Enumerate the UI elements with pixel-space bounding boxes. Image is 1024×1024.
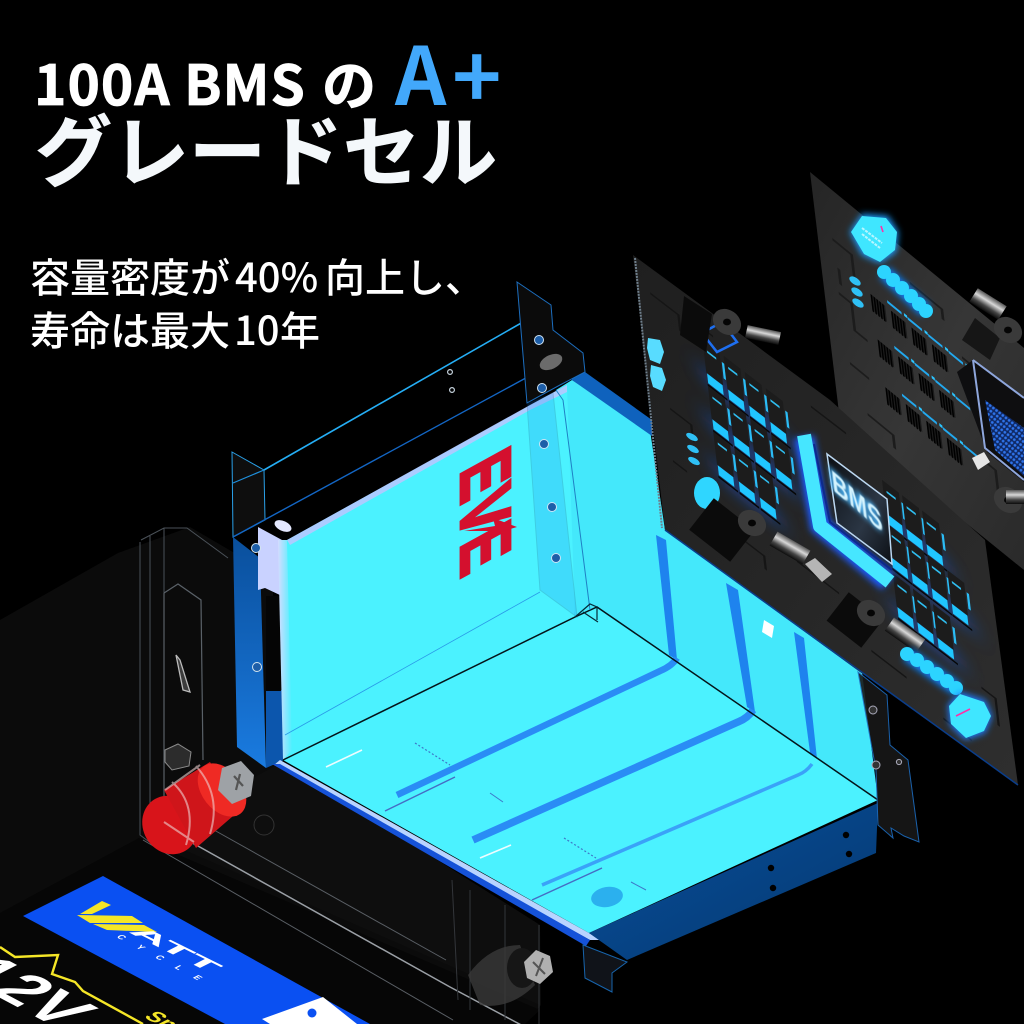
vent circle xyxy=(590,884,624,910)
terminal base xyxy=(132,786,208,864)
lower tab bracket xyxy=(583,945,627,992)
terminal collar xyxy=(188,754,256,826)
second glass plate xyxy=(556,390,590,610)
cyan disc xyxy=(694,477,720,509)
title line 1: 100A BMS: 100A BMS xyxy=(34,41,306,121)
red positive terminal xyxy=(132,744,256,864)
label sticker xyxy=(762,620,774,638)
upper dark plate xyxy=(232,452,265,537)
screw top xyxy=(969,288,1024,348)
panel: dark blue end face xyxy=(589,803,878,960)
lower rail xyxy=(143,830,453,1020)
board panel xyxy=(633,255,1018,785)
module frame edge xyxy=(973,360,1024,480)
underside stripes xyxy=(397,658,812,885)
small ticks xyxy=(490,793,646,890)
logo text: WATT: ATT xyxy=(123,923,227,975)
lavender left edge xyxy=(278,540,292,760)
BMS cyan frame xyxy=(804,435,890,582)
BMS text glow: BMS xyxy=(828,462,882,538)
right lower bracket xyxy=(858,672,919,842)
front chip grid right xyxy=(882,480,979,682)
logo: WATT chevrons xyxy=(77,901,157,932)
glass top crumple xyxy=(165,744,191,770)
panel: front face shading xyxy=(150,762,540,1005)
PCB board front xyxy=(633,255,1018,785)
title xyxy=(34,12,502,203)
board traces xyxy=(830,218,1004,538)
bolt cross xyxy=(234,774,243,790)
upper dark plate xyxy=(517,282,585,403)
module frame xyxy=(957,360,1024,482)
black slot xyxy=(266,596,281,691)
board panel xyxy=(810,172,1024,570)
board speckled edge xyxy=(635,258,662,528)
front chip rows glow xyxy=(704,370,977,679)
lavender bracket xyxy=(258,527,282,596)
lavender top edge xyxy=(287,385,567,545)
dashed marks xyxy=(415,743,596,858)
cyan small pills xyxy=(685,431,701,467)
subtitle line 1 figure: 40% xyxy=(235,246,318,304)
BMS text: BMS xyxy=(830,464,884,540)
right glass terminal cover xyxy=(452,880,539,1024)
cyan connector block xyxy=(949,694,991,738)
white tab xyxy=(273,518,293,534)
subtitle line 2 end: 年 xyxy=(280,299,320,357)
BMS chip xyxy=(827,454,892,564)
BMS frame inner line xyxy=(814,444,892,570)
panel: battery top face shadow xyxy=(0,838,540,1024)
connector pink mark xyxy=(881,226,883,232)
title highlight: A: A xyxy=(394,13,447,129)
panel: cell underside xyxy=(283,607,878,933)
heatsink chip grid xyxy=(869,285,986,486)
title line 2: グレードセル xyxy=(35,92,497,203)
lower board edge xyxy=(665,530,1018,785)
front chip grid left xyxy=(702,340,803,542)
glass highlights xyxy=(164,765,214,845)
bracket plate xyxy=(858,672,919,842)
cyan connector block xyxy=(851,216,897,262)
battery body xyxy=(0,527,541,1024)
board traces xyxy=(649,282,1003,764)
cover inner window xyxy=(164,584,203,845)
top dark bracket xyxy=(680,296,712,352)
white connector xyxy=(972,452,990,470)
screw middle xyxy=(689,498,810,564)
cover outline xyxy=(140,528,228,850)
screw bracket top xyxy=(962,318,1000,360)
voltage badge outline xyxy=(0,947,143,1024)
hex bolt xyxy=(218,761,254,804)
cyan chain glow xyxy=(884,272,926,311)
rails along battery edge xyxy=(164,827,540,1024)
blue edge strip xyxy=(572,372,652,436)
blue under section xyxy=(266,690,284,768)
small battery screw hole xyxy=(254,815,274,835)
plate screws xyxy=(534,336,560,562)
cyan small pills xyxy=(848,274,865,310)
title highlight: plus: + xyxy=(452,12,502,133)
glass plate over cell xyxy=(527,393,577,617)
left mounting plate xyxy=(232,452,293,768)
screw top xyxy=(708,304,781,345)
second frame line xyxy=(233,373,535,537)
frame holes xyxy=(448,370,454,392)
left plate screws xyxy=(252,544,262,672)
blue bracket xyxy=(702,322,737,352)
PCB board rear xyxy=(810,172,1024,570)
hex bolt xyxy=(524,950,553,984)
cyan connector glow xyxy=(948,692,992,740)
end face holes xyxy=(768,832,852,891)
corner mark xyxy=(575,604,598,622)
BMS frame glow xyxy=(804,437,888,582)
screw lower xyxy=(827,592,925,652)
logo arrow xyxy=(464,518,517,535)
subtitle line 2 start: 寿命は最大 xyxy=(30,299,230,357)
wall stripes xyxy=(656,535,818,768)
terminal body xyxy=(164,762,240,848)
connector pins xyxy=(862,228,882,248)
cyan chain xyxy=(877,265,933,318)
right mounting plates xyxy=(252,282,598,672)
black corner lines xyxy=(283,607,878,800)
logo text: CYCLE: CYCLE xyxy=(114,933,219,988)
standoff bolt xyxy=(537,351,565,373)
label dot xyxy=(308,1008,316,1018)
cyan chain glow xyxy=(907,654,957,689)
left glass terminal cover xyxy=(140,528,540,1024)
cyan chain xyxy=(900,647,963,695)
panel: battery casing xyxy=(0,527,541,1024)
upper frame lines xyxy=(233,306,551,537)
subtitle line 1 end: 向上し、 xyxy=(325,246,485,304)
bracket screws xyxy=(869,706,902,769)
glass wrap xyxy=(468,945,535,1006)
underside seams xyxy=(385,777,602,900)
blue lower plate xyxy=(233,537,266,768)
subtitle xyxy=(30,246,485,357)
logo text: EVE: EVE xyxy=(446,434,526,589)
subtitle line 2 figure: 10 xyxy=(234,299,280,357)
EVE battery cell block xyxy=(272,372,878,960)
frame small line xyxy=(233,470,264,483)
screw bottom xyxy=(989,482,1024,518)
bright frame line xyxy=(264,306,551,470)
white marks xyxy=(326,750,511,858)
lavender lower edge xyxy=(274,760,600,940)
panel: cell rear wall xyxy=(556,380,878,800)
subtitle line 1 start: 容量密度が xyxy=(30,246,230,304)
panel: cell front face xyxy=(283,385,575,760)
bolt cross xyxy=(533,958,545,976)
connector pink mark xyxy=(956,709,970,716)
blue lower edge xyxy=(272,764,590,946)
left connectors xyxy=(647,338,666,391)
glass hinge piece xyxy=(176,655,190,692)
blue brand label xyxy=(23,876,370,1024)
terminal ring xyxy=(507,948,537,988)
cyan connector glow xyxy=(850,214,898,263)
title line 1: の: の xyxy=(322,42,376,121)
white label corner xyxy=(262,997,357,1024)
white connector xyxy=(805,558,832,582)
thin blue front line xyxy=(285,592,540,735)
module blue dot display xyxy=(985,400,1024,476)
negative terminal xyxy=(468,945,553,1006)
